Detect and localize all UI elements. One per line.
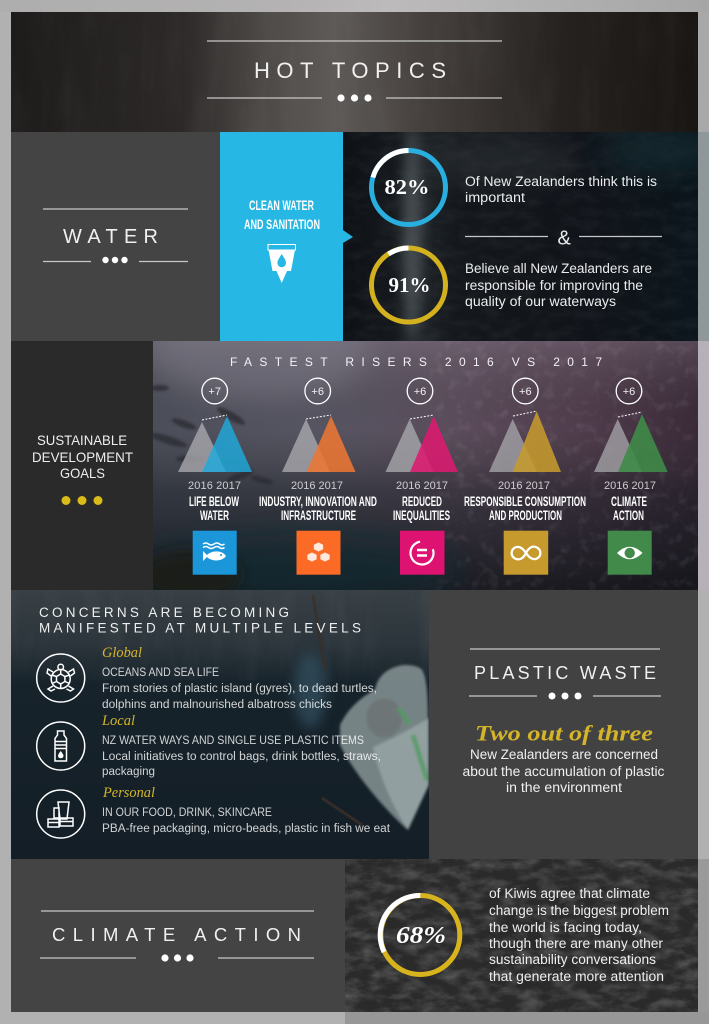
text: climate statistic <box>489 886 669 984</box>
text: responsibility: Believe all New Zealanders are <box>465 261 652 276</box>
panel: plastic waste <box>429 590 698 859</box>
riser: reduced inequalities <box>386 378 458 575</box>
heading: concerns <box>39 605 361 636</box>
text: global concerns: From stories of plastic island (gyres), to dead turtles, <box>102 683 377 695</box>
icon: turtle <box>37 654 85 702</box>
icon: eye goal <box>608 531 652 575</box>
text: local concerns <box>101 713 381 778</box>
riser: climate action: CLIMATE <box>611 494 647 509</box>
callout: two out of three: Two out of three <box>475 720 653 746</box>
icon: three dots <box>337 94 372 102</box>
text: responsibility <box>465 261 652 309</box>
riser: climate action: ACTION <box>613 508 644 523</box>
panel: sustainable development goals heading: SUSTAINABLE <box>37 432 127 448</box>
panel: water heading <box>11 132 220 341</box>
riser: climate action <box>594 378 668 575</box>
text: climate statistic: the world is facing today, <box>489 920 642 935</box>
text: plastic concern: about the accumulation of plastic <box>462 764 665 779</box>
text: local concerns: NZ WATER WAYS AND SINGLE USE PLASTIC ITEMS <box>102 735 364 747</box>
stat: 68 percent: 68% <box>396 923 446 949</box>
riser: responsible consumption and production: 2016 2017 <box>498 480 550 492</box>
panel: sustainable development goals heading: DEVELOPMENT <box>32 449 133 465</box>
riser: life below water: +7 <box>208 386 221 398</box>
text: importance <box>465 174 657 205</box>
stat: 91 percent <box>372 248 446 322</box>
text: plastic concern: in the environment <box>506 780 622 795</box>
riser: life below water: WATER <box>200 508 229 523</box>
panel: hot topics header <box>11 12 698 132</box>
icon: bottle <box>37 722 85 770</box>
text: plastic concern: New Zealanders are concerned <box>470 747 658 762</box>
panel: climate action heading <box>11 859 345 1012</box>
text: local concerns: Local <box>101 713 135 729</box>
icon: water dots <box>102 257 128 263</box>
heading: plastic waste: PLASTIC WASTE <box>474 663 656 683</box>
panel: sustainable development goals heading: GOALS <box>60 465 105 481</box>
icon: fish goal <box>193 531 237 575</box>
icon: climate dots <box>161 954 194 962</box>
riser: industry, innovation and infrastructure: +6 <box>311 386 324 398</box>
panel: sustainable development goals heading <box>11 341 153 590</box>
text: personal concerns: Personal <box>102 785 155 801</box>
riser: reduced inequalities: +6 <box>414 386 426 398</box>
riser: industry, innovation and infrastructure: INDUSTRY, INNOVATION AND <box>259 494 377 509</box>
text: climate statistic: change is the biggest problem <box>489 903 669 918</box>
text: responsibility: responsible for improving the <box>465 278 643 293</box>
text: climate statistic: sustainability conversations <box>489 952 656 967</box>
icon: cubes goal <box>296 531 340 575</box>
panel: clean water and sanitation goal <box>220 132 353 341</box>
text: climate statistic: of Kiwis agree that climate <box>489 886 650 901</box>
stat: 68 percent <box>380 895 460 974</box>
text: local concerns: Local initiatives to control bags, drink bottles, straws, <box>102 751 381 763</box>
riser: reduced inequalities: REDUCED <box>402 494 442 509</box>
riser: industry, innovation and infrastructure <box>259 378 377 575</box>
goal label: CLEAN WATER <box>249 197 314 213</box>
riser: climate action: 2016 2017 <box>604 480 656 492</box>
title: HOT TOPICS <box>254 58 446 83</box>
riser: reduced inequalities: 2016 2017 <box>396 480 448 492</box>
stat: 82 percent: 82% <box>384 175 430 199</box>
riser: responsible consumption and production <box>464 378 586 575</box>
text: global concerns: OCEANS AND SEA LIFE <box>102 667 219 679</box>
stat: 82 percent <box>372 150 446 224</box>
heading: fastest risers: FASTEST RISERS 2016 VS 2017 <box>230 355 602 369</box>
text: responsibility: quality of our waterways <box>465 294 616 309</box>
icon: packaging <box>37 790 85 838</box>
text: importance: important <box>465 190 525 205</box>
heading: concerns: CONCERNS ARE BECOMING <box>39 605 289 620</box>
text: global concerns: Global <box>102 645 142 661</box>
text: local concerns: packaging <box>102 766 155 778</box>
heading: climate action: CLIMATE ACTION <box>52 924 301 945</box>
riser: life below water <box>178 378 252 575</box>
riser: industry, innovation and infrastructure: 2016 2017 <box>291 480 343 492</box>
icon: equality goal <box>400 531 444 575</box>
stat: 91 percent: 91% <box>388 273 430 297</box>
panel: concerns photo <box>11 590 429 859</box>
heading: water: WATER <box>63 226 158 248</box>
icon: gold dots <box>62 496 102 505</box>
riser: responsible consumption and production: AND PRODUCTION <box>489 508 562 523</box>
text: plastic concern <box>462 747 665 795</box>
heading: concerns: MANIFESTED AT MULTIPLE LEVELS <box>39 620 361 636</box>
icon: plastic dots <box>548 692 582 700</box>
text: importance: Of New Zealanders think this is <box>465 174 657 189</box>
panel: clean water and sanitation goal: AND SANITATION <box>244 216 320 232</box>
riser: responsible consumption and production: RESPONSIBLE CONSUMPTION <box>464 494 586 509</box>
text: climate statistic: though there are many other <box>489 936 664 951</box>
text: personal concerns <box>102 785 391 835</box>
panel: water statistics photo <box>343 125 709 345</box>
riser: life below water: 2016 2017 <box>188 480 241 492</box>
riser: reduced inequalities: INEQUALITIES <box>393 508 450 523</box>
ampersand divider: & <box>558 228 572 250</box>
riser: climate action: +6 <box>623 386 635 398</box>
icon: water glass <box>268 244 296 283</box>
riser: responsible consumption and production: +6 <box>519 386 532 398</box>
panel: cracked earth statistic <box>345 859 698 1012</box>
text: climate statistic: that generate more attention <box>489 969 664 984</box>
panel: fastest risers photo <box>153 341 698 590</box>
text: global concerns: dolphins and malnourished albatross chicks <box>102 699 332 711</box>
text: personal concerns: PBA-free packaging, micro-beads, plastic in fish we eat <box>102 823 391 835</box>
icon: infinity goal <box>504 531 548 575</box>
text: global concerns <box>102 645 377 711</box>
text: personal concerns: IN OUR FOOD, DRINK, SKINCARE <box>102 807 272 819</box>
riser: life below water: LIFE BELOW <box>189 494 239 509</box>
riser: industry, innovation and infrastructure: INFRASTRUCTURE <box>281 508 356 523</box>
